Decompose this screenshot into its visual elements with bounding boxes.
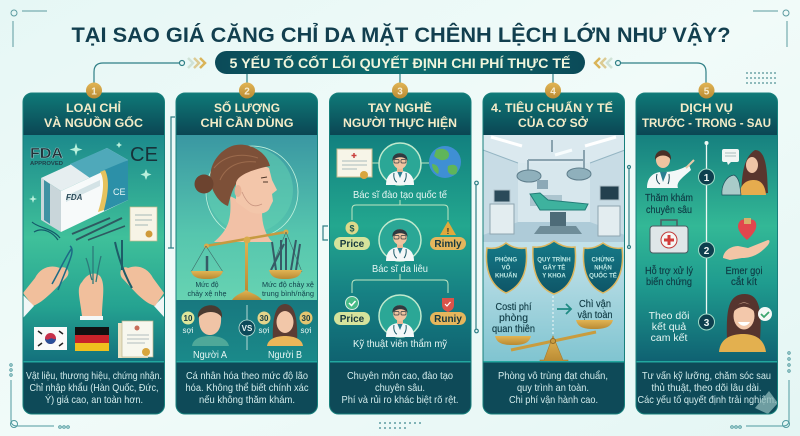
cost text right: Chì vận <box>579 298 611 310</box>
illustration: smiling woman <box>719 294 766 352</box>
shield 2 <box>533 241 576 294</box>
heading panel 1 <box>23 93 165 135</box>
step 1 badge <box>698 169 714 185</box>
icon: Korean flag <box>34 327 67 350</box>
heading panel 1: VÀ NGUỒN GỐC <box>44 116 144 130</box>
icon: check bubble <box>758 307 772 321</box>
label theo dõi <box>649 310 689 344</box>
heading panel 5: TRƯỚC - TRONG - SAU <box>642 117 771 130</box>
badge VS: VS <box>242 324 253 333</box>
icon: doctor top <box>379 143 421 185</box>
label thăm khám: chuyên sâu <box>646 204 692 216</box>
label hỗ trợ <box>645 264 694 288</box>
shield 3: QUỐC TẾ <box>589 272 617 280</box>
number badge 4: 4 <box>550 86 556 98</box>
label Người B: Người B <box>268 349 302 361</box>
cost text left: phòng <box>499 312 528 324</box>
label Người A: Người A <box>193 349 227 361</box>
icon: certificate <box>337 149 372 179</box>
label emer gọi: cắt kít <box>731 275 757 288</box>
panel 2: số lượng <box>176 93 318 414</box>
footer panel 5: thủ thuật, theo dõi lâu dài. <box>652 382 762 394</box>
number badge 1 <box>86 82 102 98</box>
number badge 3 <box>392 82 408 98</box>
footer panel 4: Phòng vô trùng đạt chuẩn, <box>498 370 608 382</box>
footer panel 1: Ý) giá cao, an toàn hơn. <box>45 393 143 406</box>
icon: product box: FDA <box>66 193 83 202</box>
icon: warning <box>440 221 456 236</box>
sparkles <box>29 142 152 203</box>
illustration: patient woman <box>722 150 768 195</box>
label middle: Bác sĩ da liêu <box>372 263 428 275</box>
label theo dõi: Theo dõi <box>649 310 689 322</box>
person B <box>267 304 303 346</box>
heading panel 4: CỦA CƠ SỞ <box>518 117 588 130</box>
icon: product box: CE <box>113 187 126 197</box>
footer panel 5: Tư vấn kỹ lưỡng, chăm sóc sau <box>642 370 771 382</box>
number badge 2: 2 <box>244 86 250 98</box>
price pill bottom: Price <box>340 314 365 325</box>
icon: doctor consult <box>647 150 694 188</box>
illustration: hands holding threads <box>23 240 165 320</box>
dot grid bottom middle <box>379 422 421 429</box>
price pill middle: Price <box>340 239 365 250</box>
footer panel 3 <box>330 361 472 414</box>
shield 3 <box>583 243 623 293</box>
heading panel 5: DỊCH VỤ <box>680 102 733 115</box>
icon: FDA approved: APPROVED <box>30 161 63 167</box>
footer panel 4: Chi phí vận hành cao. <box>509 394 598 406</box>
label bottom: Kỹ thuật viên thẩm mỹ <box>353 338 448 350</box>
icon: German flag <box>75 327 109 351</box>
person A <box>192 305 229 346</box>
icon: shield warning <box>442 298 454 312</box>
heading panel 2: CHỈ CẦN DÙNG <box>200 117 294 130</box>
footer panel 2 <box>176 361 318 414</box>
step 3 badge <box>698 314 714 330</box>
cost text right: vận toàn <box>578 309 613 321</box>
label emer gọi: Emer gọi <box>726 265 762 277</box>
footer panel 4: quy trình an toàn. <box>517 382 589 394</box>
step 1 badge: 1 <box>704 173 710 184</box>
badge 30 sợi right: sợi <box>300 326 312 335</box>
step 2 badge <box>698 242 714 258</box>
number badge 5 <box>698 82 714 98</box>
number badge 5: 5 <box>704 86 710 98</box>
heading panel 4: 4. TIÊU CHUẨN Y TẾ <box>491 102 613 115</box>
decorative corner bottom-right <box>731 352 790 428</box>
icon: product box <box>41 148 128 232</box>
heading panel 2 <box>176 93 318 135</box>
label hỗ trợ: Hỗ trợ xử lý <box>645 264 694 277</box>
shield 3: CHỨNG <box>592 256 615 264</box>
price pill bottom <box>334 312 370 325</box>
decorative corner top-right <box>753 10 789 47</box>
badge 30 sợi right <box>300 312 312 335</box>
label theo dõi: kết quả <box>652 321 686 333</box>
icon: CE mark: CE <box>130 144 158 166</box>
illustration: balance scale <box>188 230 314 300</box>
icon: heart in hand <box>723 218 770 260</box>
footer panel 1 <box>23 361 165 414</box>
icon: chat bubble <box>722 149 739 165</box>
shield 1 <box>486 243 527 293</box>
dot grid top right <box>746 72 776 84</box>
shield 3: NHẬN <box>594 264 612 272</box>
shield 2: GÂY TÊ <box>543 264 565 272</box>
heading panel 3: NGƯỜI THỰC HIỆN <box>343 117 457 130</box>
shield 1: PHÒNG <box>495 256 517 264</box>
panel 5: dịch vụ <box>636 93 778 414</box>
icon: doctor middle <box>379 219 421 261</box>
heading panel 2: SỐ LƯỢNG <box>214 101 280 115</box>
panel 3: tay nghề <box>330 93 472 414</box>
icon: FDA approved <box>30 148 63 165</box>
footer panel 1: Chỉ nhập khẩu (Hàn Quốc, Đức, <box>30 382 158 394</box>
runiy pill: Runiy <box>434 314 462 325</box>
cost text left: Costi phí <box>496 301 532 313</box>
icon: check <box>346 296 358 310</box>
label top: Bác sĩ đào tạo quốc tế <box>353 189 447 201</box>
illustration: seesaw <box>495 320 613 362</box>
icon: first aid kit <box>650 220 688 253</box>
price pill middle <box>334 237 370 250</box>
comparison area <box>176 300 318 363</box>
icon: certificates <box>118 321 153 358</box>
number badge 4 <box>545 82 561 98</box>
heading panel 1: LOẠI CHỈ <box>66 102 122 115</box>
panel 4: tiêu chuẩn y tế <box>483 93 625 414</box>
badge 10 sợi: sợi <box>182 326 194 335</box>
timeline <box>704 141 708 320</box>
illustration: balance scale: Mức độ chảy xệ <box>262 280 314 289</box>
connector lines to number badges <box>94 60 706 333</box>
icon: dollar coin <box>346 222 358 234</box>
subtitle pill: 5 YẾU TỐ CỐT LÕI QUYẾT ĐỊNH CHI PHÍ THỰC TẾ <box>230 54 570 71</box>
step 2 badge: 2 <box>704 246 710 257</box>
cost text right <box>578 298 613 321</box>
illustration: balance scale: chảy xệ nhẹ <box>188 289 226 298</box>
decorative corner top-left <box>11 10 47 47</box>
shield 1: KHUẨN <box>495 272 517 280</box>
label thăm khám: Thăm khám <box>645 192 693 204</box>
heading panel 3 <box>330 93 472 135</box>
panel 1: loại chỉ <box>23 93 165 414</box>
icon: doctor bottom <box>379 295 421 337</box>
subtitle pill <box>215 51 585 74</box>
number badge 1: 1 <box>91 86 97 98</box>
cost text left: quan thiên <box>492 323 535 335</box>
footer panel 4 <box>483 361 625 414</box>
rimly pill: Rimly <box>434 239 462 250</box>
heading panel 3: TAY NGHỀ <box>368 102 432 115</box>
label emer gọi <box>726 265 762 288</box>
rimly pill <box>430 237 466 250</box>
number badge 3: 3 <box>397 86 403 98</box>
footer panel 1: Vật liệu, thương hiệu, chứng nhận. <box>26 370 162 382</box>
label hỗ trợ: biến chứng <box>646 276 692 288</box>
icon: FDA approved: FDA <box>30 145 63 162</box>
chevrons left <box>188 58 205 68</box>
illustration: operating room <box>483 135 625 242</box>
footer panel 3: Chuyên môn cao, đào tạo <box>347 370 453 382</box>
heading panel 4 <box>483 93 625 135</box>
title: TẠI SAO GIÁ CĂNG CHỈ DA MẶT CHÊNH LỆCH LỚN NHƯ VẬY? <box>72 22 730 47</box>
heading panel 5 <box>636 93 778 135</box>
badge 30 sợi right: 30 <box>302 314 311 323</box>
icon: warning: ! <box>447 227 449 236</box>
step 3 badge: 3 <box>704 318 710 329</box>
badge 30 sợi left: sợi <box>258 326 270 335</box>
label theo dõi: cam kết <box>651 332 687 344</box>
footer panel 5 <box>636 361 778 414</box>
icon: certificate document <box>130 207 157 241</box>
runiy pill <box>430 312 466 325</box>
badge 30 sợi left <box>258 312 270 335</box>
footer panel 2: hóa. Không thể biết chính xác <box>186 382 308 394</box>
icon: threads and tools <box>32 218 125 240</box>
icon: globe <box>429 146 461 178</box>
label thăm khám <box>645 192 693 216</box>
footer panel 5: Các yếu tố quyết định trải nghiệm. <box>638 394 776 406</box>
shield 1: VÔ <box>502 264 511 272</box>
branch lines <box>352 163 448 293</box>
cost text left <box>492 301 535 335</box>
shield 2: Y KHOA <box>542 272 566 280</box>
footer panel 3: Phí và rủi ro khác biệt rõ rệt. <box>342 394 458 406</box>
illustration: balance scale: Mức độ <box>196 280 218 289</box>
badge VS <box>239 320 255 336</box>
footer panel 2: nếu không thăm khám. <box>199 394 295 406</box>
footer panel 3: chuyên sâu. <box>375 382 425 394</box>
divider and arrow <box>553 296 571 334</box>
footer panel 2: Cá nhân hóa theo mức độ lão <box>186 370 308 382</box>
shield 2: QUY TRÌNH <box>537 256 571 264</box>
icon: dollar coin: $ <box>349 224 355 234</box>
badge 30 sợi left: 30 <box>260 314 269 323</box>
illustration: face profile <box>194 145 298 242</box>
badge 10 sợi <box>182 312 194 335</box>
chevrons right <box>595 58 612 68</box>
number badge 2 <box>239 82 255 98</box>
badge 10 sợi: 10 <box>184 314 193 323</box>
illustration: balance scale: trung bình/nặng <box>262 289 314 298</box>
decorative corner bottom-left <box>10 364 69 428</box>
